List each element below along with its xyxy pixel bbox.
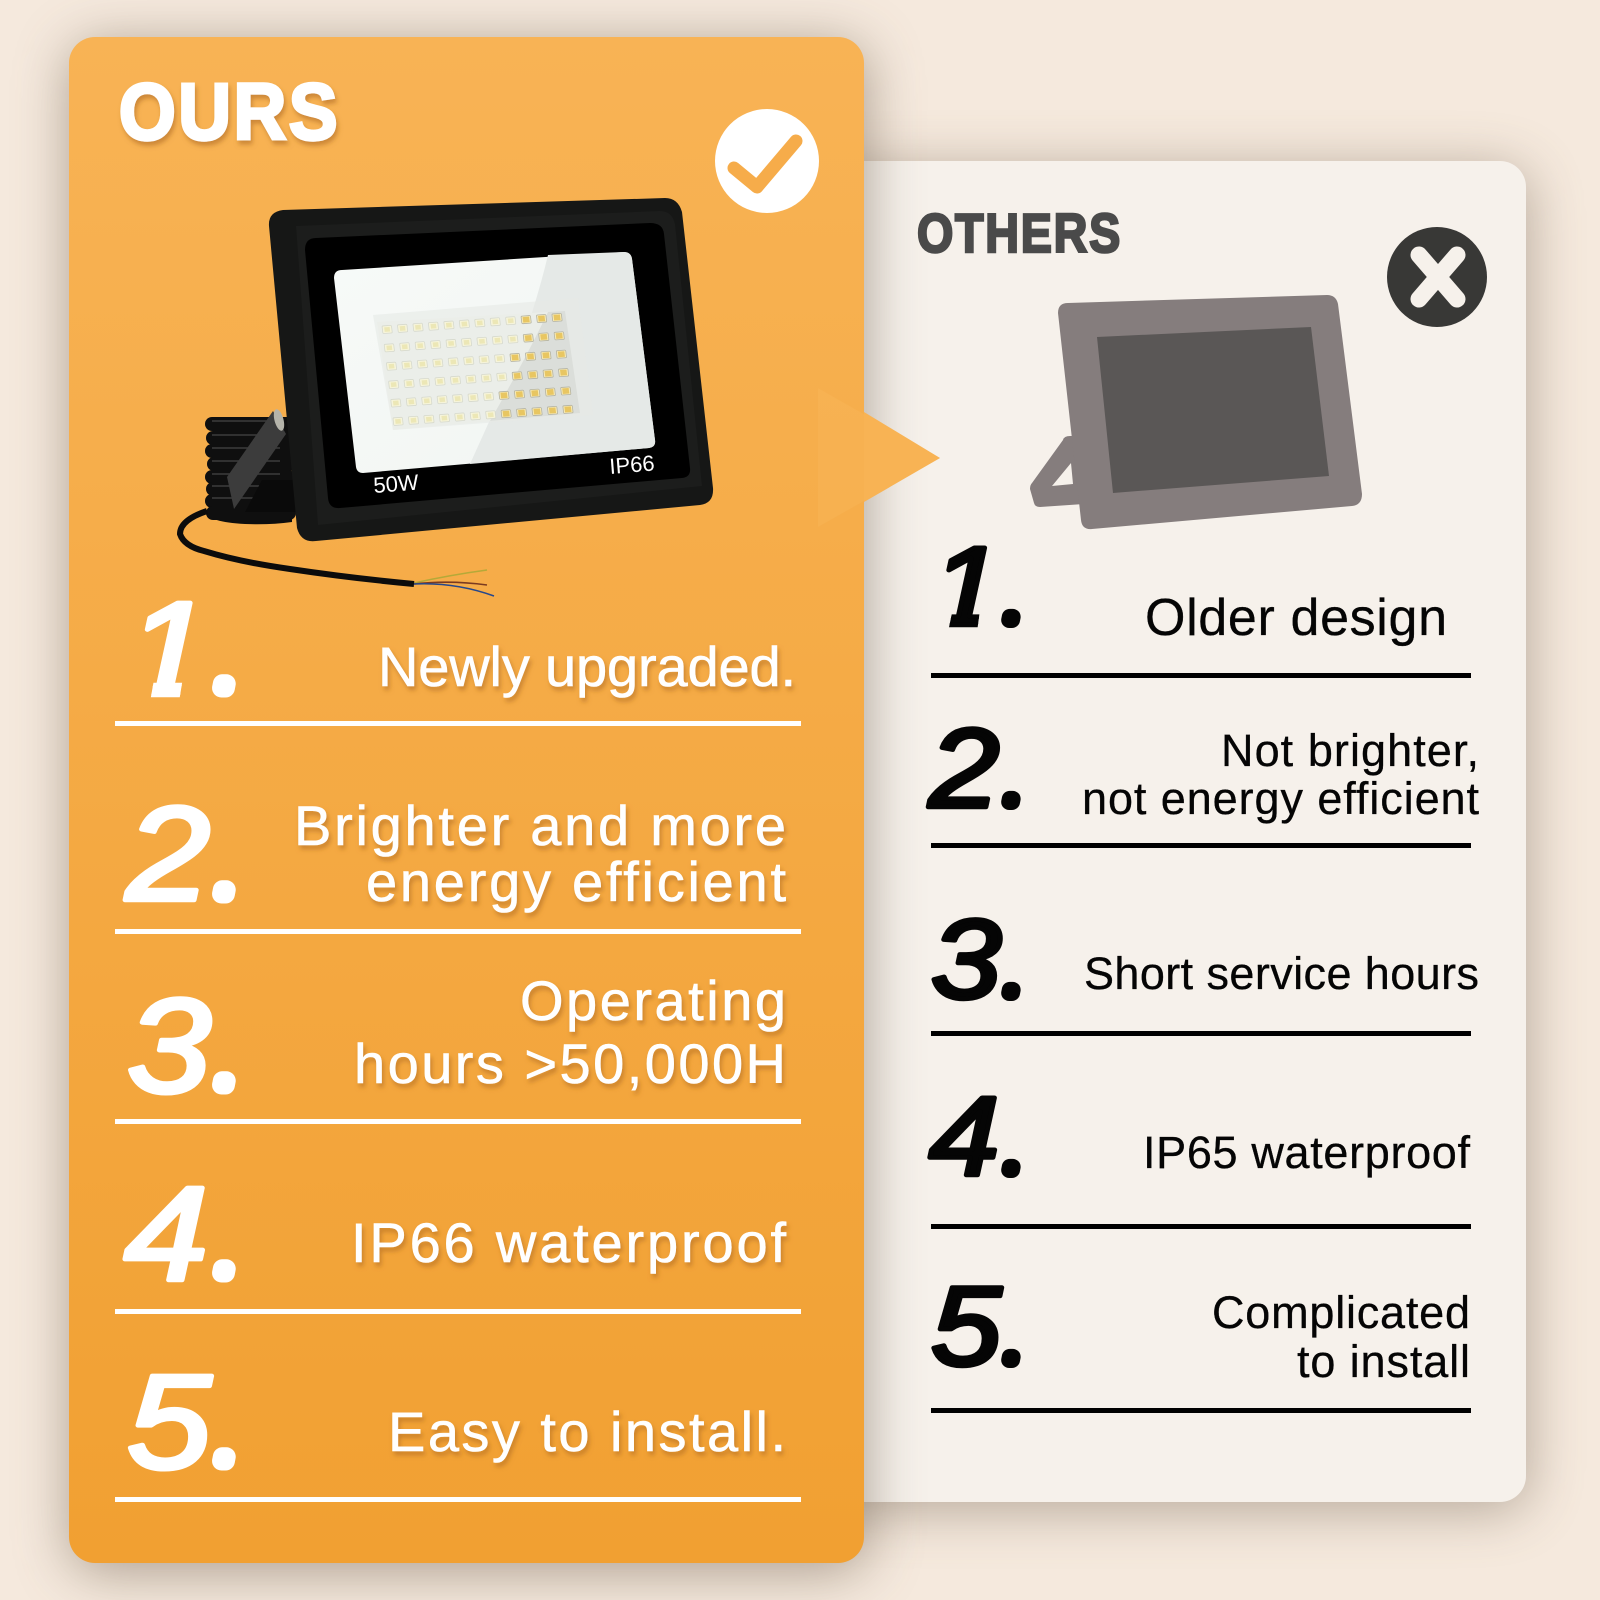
glass panel	[334, 252, 655, 473]
reflection	[470, 252, 655, 464]
led plate	[377, 311, 580, 430]
item 4: .	[1008, 1144, 1016, 1177]
item 4	[115, 1160, 801, 1314]
item 3	[931, 898, 1479, 1036]
item 2: .	[1008, 776, 1016, 809]
item 1: Older design	[1145, 589, 1447, 647]
lamp label: 50W: 50W	[372, 469, 420, 498]
arrow: pointing to others	[818, 388, 940, 527]
item 2	[928, 707, 1479, 848]
item 1: .	[220, 653, 231, 697]
power cable	[180, 511, 414, 584]
item 2: 2	[125, 780, 210, 929]
item 1: 1	[126, 575, 210, 724]
item 4: IP65 waterproof	[1143, 1127, 1470, 1178]
item 5: .	[220, 1426, 231, 1470]
item 3: .	[220, 1050, 231, 1094]
product: floodlight	[180, 198, 713, 596]
panel: ours	[69, 37, 940, 1571]
item 5: to install	[1297, 1336, 1470, 1387]
item 2: Not brighter,	[1221, 725, 1479, 776]
led recess	[373, 298, 593, 430]
icon: grey lamp silhouette	[1030, 295, 1362, 529]
item 4: IP66 waterproof	[351, 1211, 786, 1274]
item 3: Operating	[520, 969, 786, 1032]
comparison list: others	[928, 525, 1479, 1413]
mounting bracket	[227, 408, 286, 509]
item 2: not energy efficient	[1082, 773, 1479, 824]
item 5: 5	[931, 1265, 1002, 1389]
item 5: Easy to install.	[388, 1400, 786, 1463]
comparison list: ours	[115, 575, 801, 1502]
item 3: Short service hours	[1084, 948, 1479, 999]
housing bevel	[296, 211, 702, 525]
item 2: 2	[928, 707, 999, 831]
icon: cross badge	[1387, 227, 1487, 327]
item 4	[929, 1075, 1471, 1229]
item 1	[931, 546, 1471, 678]
heading: others: OTHERS	[917, 202, 1122, 264]
item 1	[115, 600, 801, 726]
item 5	[931, 1265, 1471, 1413]
led array	[382, 313, 573, 425]
bare wires	[414, 570, 494, 596]
item 4: 4	[929, 1075, 999, 1199]
item 2: Brighter and more	[294, 794, 786, 857]
item 5: 5	[127, 1348, 212, 1497]
item 2	[115, 780, 801, 934]
item 1: 1	[931, 525, 1001, 649]
item 3: 3	[931, 898, 1001, 1022]
cable coil	[205, 417, 297, 524]
item 2: .	[220, 859, 231, 903]
lamp label: IP66: IP66	[608, 451, 656, 479]
heading: ours: OURS	[119, 68, 340, 157]
black window	[305, 223, 690, 508]
item 4: 4	[124, 1160, 208, 1309]
item 3: 3	[127, 972, 211, 1121]
item 1: Newly upgraded.	[378, 635, 796, 698]
item 5	[115, 1348, 801, 1502]
lamp housing	[269, 198, 713, 541]
item 3: .	[1008, 967, 1016, 1000]
panel: others	[820, 161, 1528, 1510]
item 2: energy efficient	[366, 850, 786, 913]
item 5: .	[1008, 1334, 1016, 1367]
item 4: .	[220, 1238, 231, 1282]
icon: check badge	[715, 109, 819, 213]
item 1: .	[1008, 594, 1016, 627]
item 3	[115, 969, 801, 1124]
item 3: hours >50,000H	[354, 1032, 786, 1095]
item 5: Complicated	[1212, 1287, 1470, 1338]
